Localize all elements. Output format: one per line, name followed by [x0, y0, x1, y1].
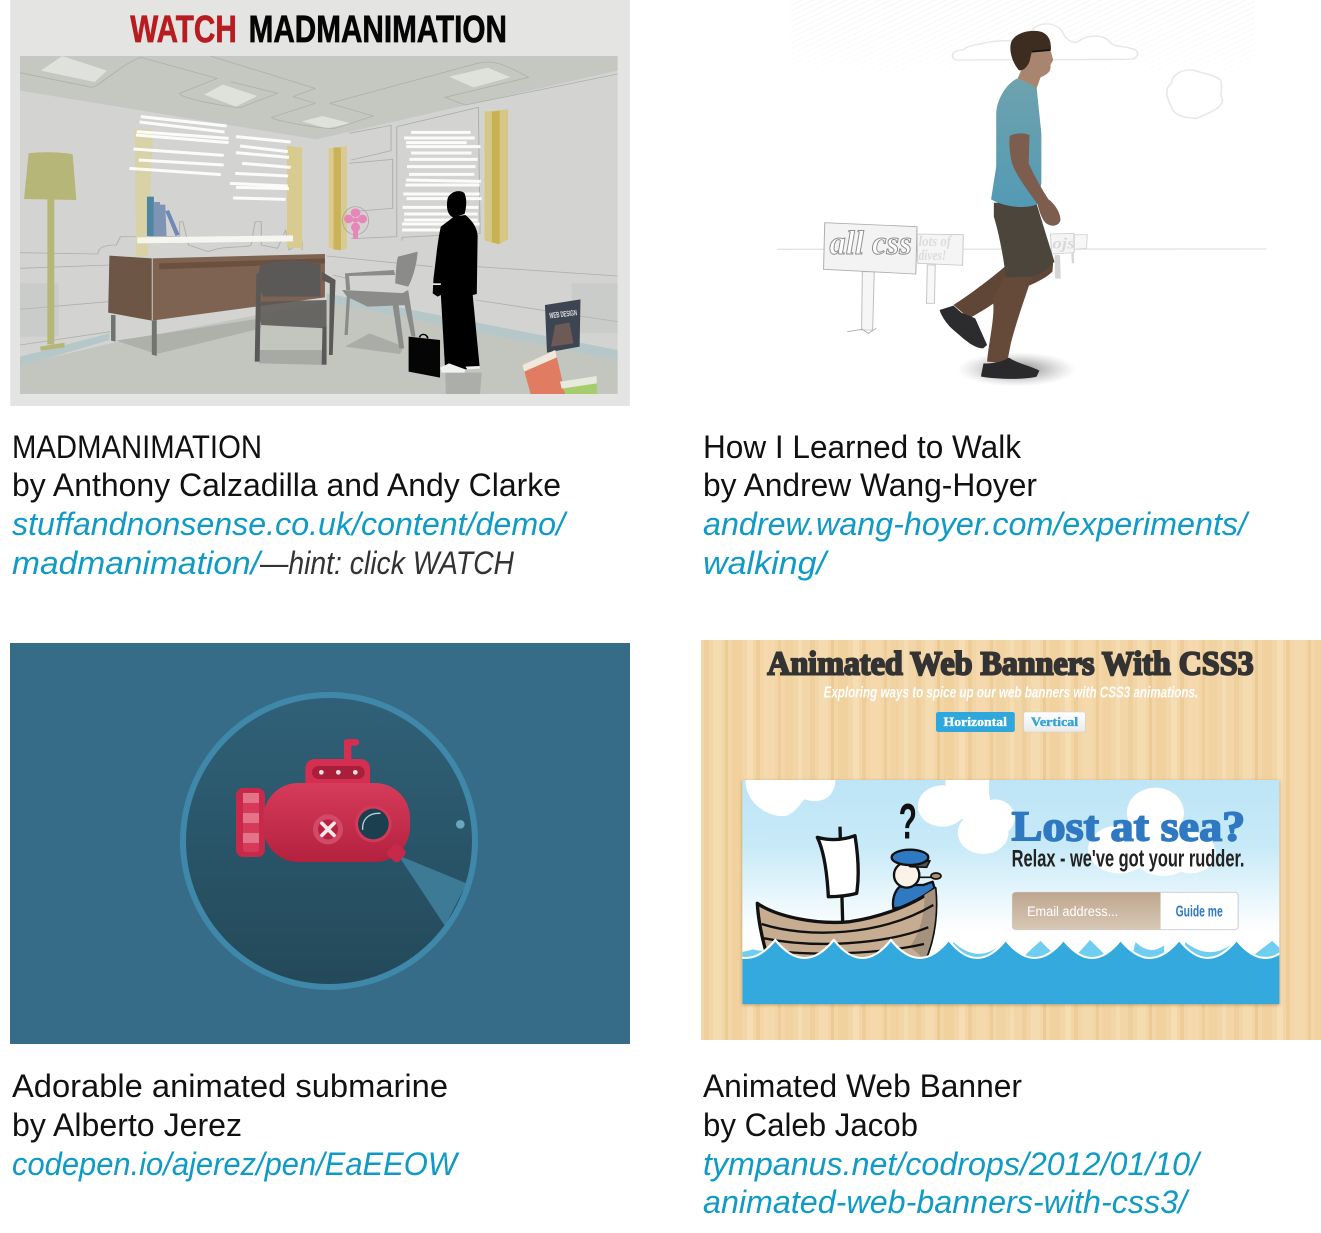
fan — [342, 207, 369, 239]
caption: Adorable animated submarine: by Alberto Jerez — [12, 1107, 242, 1143]
books on floor: WEB DESIGN — [549, 308, 578, 320]
button: Horizontal — [936, 712, 1015, 732]
caption: How I Learned to Walk — [703, 429, 1250, 581]
clouds — [952, 24, 1223, 118]
back leg — [953, 262, 1053, 318]
caption: Animated Web Banner: animated-web-banners-with-css3/ — [703, 1184, 1190, 1220]
caption: Adorable animated submarine: codepen.io/ajerez/pen/EaEEOW — [12, 1146, 460, 1182]
boat and sailor: ? — [899, 793, 917, 849]
caption: How I Learned to Walk: by Andrew Wang-Hoyer — [703, 467, 1037, 503]
heading: WATCH MADMANIMATION — [130, 9, 507, 51]
panel: Madmanimation screenshot — [10, 0, 630, 406]
front leg — [987, 275, 1032, 363]
shorts — [994, 203, 1054, 278]
caption: Madmanimation: MADMANIMATION — [12, 429, 262, 465]
caption: How I Learned to Walk: walking/ — [703, 545, 829, 581]
signposts: lots of — [919, 234, 952, 250]
caption: How I Learned to Walk: How I Learned to Walk — [703, 429, 1022, 465]
shelf and books — [137, 197, 293, 243]
caption: Adorable animated submarine — [12, 1068, 460, 1182]
head — [1018, 50, 1053, 88]
desk — [108, 254, 325, 356]
boat and sailor — [757, 793, 941, 960]
curtains — [135, 109, 508, 257]
sonar circle — [183, 695, 475, 987]
caption: Madmanimation: by Anthony Calzadilla and Andy Clarke — [12, 467, 561, 503]
panel: Animated Web Banners screenshot — [701, 640, 1321, 1040]
submarine illustration — [183, 695, 475, 987]
caption: Madmanimation: —hint: click WATCH — [259, 545, 515, 581]
signposts — [824, 223, 1087, 333]
floor lamp — [24, 152, 76, 351]
email form — [1012, 892, 1238, 930]
signposts: all css — [829, 224, 912, 261]
heading: WATCH MADMANIMATION: MADMANIMATION — [249, 9, 507, 51]
email form: Guide me — [1176, 903, 1223, 920]
banner: Lost at sea — [717, 779, 1294, 1004]
horizon line — [777, 247, 1266, 251]
button: Vertical: Vertical — [1031, 716, 1078, 730]
light beam — [398, 855, 467, 926]
caption: Adorable animated submarine: Adorable animated submarine — [12, 1068, 448, 1104]
dark chair — [255, 261, 336, 365]
bubble — [456, 820, 465, 829]
button: Horizontal: Horizontal — [944, 716, 1007, 730]
walking man — [940, 31, 1076, 387]
email form: Email address... — [1027, 904, 1118, 920]
man in suit — [433, 191, 482, 394]
banner headline: Lost at sea? — [1012, 803, 1245, 850]
illustration: office room — [20, 56, 618, 394]
caption: Animated Web Banner — [703, 1068, 1202, 1220]
caption: Animated Web Banner: Animated Web Banner — [703, 1068, 1022, 1104]
caption: How I Learned to Walk: andrew.wang-hoyer.com/experiments/ — [703, 506, 1250, 542]
grey chair — [342, 252, 418, 354]
sonar ring — [183, 695, 475, 987]
arm — [1009, 133, 1060, 226]
caption: Animated Web Banner: by Caleb Jacob — [703, 1107, 918, 1143]
waves — [717, 940, 1294, 1004]
caption: Madmanimation: stuffandnonsense.co.uk/content/demo/ — [12, 506, 568, 542]
caption: Madmanimation: madmanimation/ — [12, 545, 263, 581]
caption: Animated Web Banner: tympanus.net/codrops/2012/01/10/ — [703, 1146, 1202, 1182]
panel: animated submarine — [10, 643, 630, 1044]
button: Vertical — [1024, 712, 1085, 732]
submarine — [236, 739, 410, 864]
briefcase — [409, 334, 440, 378]
window light bars — [129, 117, 482, 230]
signposts: ojs — [1052, 234, 1075, 252]
shirt — [991, 79, 1041, 207]
books on floor — [522, 299, 597, 394]
heading: WATCH MADMANIMATION: WATCH — [130, 9, 237, 51]
signposts: dives! — [919, 248, 946, 264]
caption: Madmanimation — [12, 429, 568, 581]
banner clouds — [746, 779, 1216, 876]
panel: How I Learned to Walk screenshot — [777, 0, 1266, 387]
